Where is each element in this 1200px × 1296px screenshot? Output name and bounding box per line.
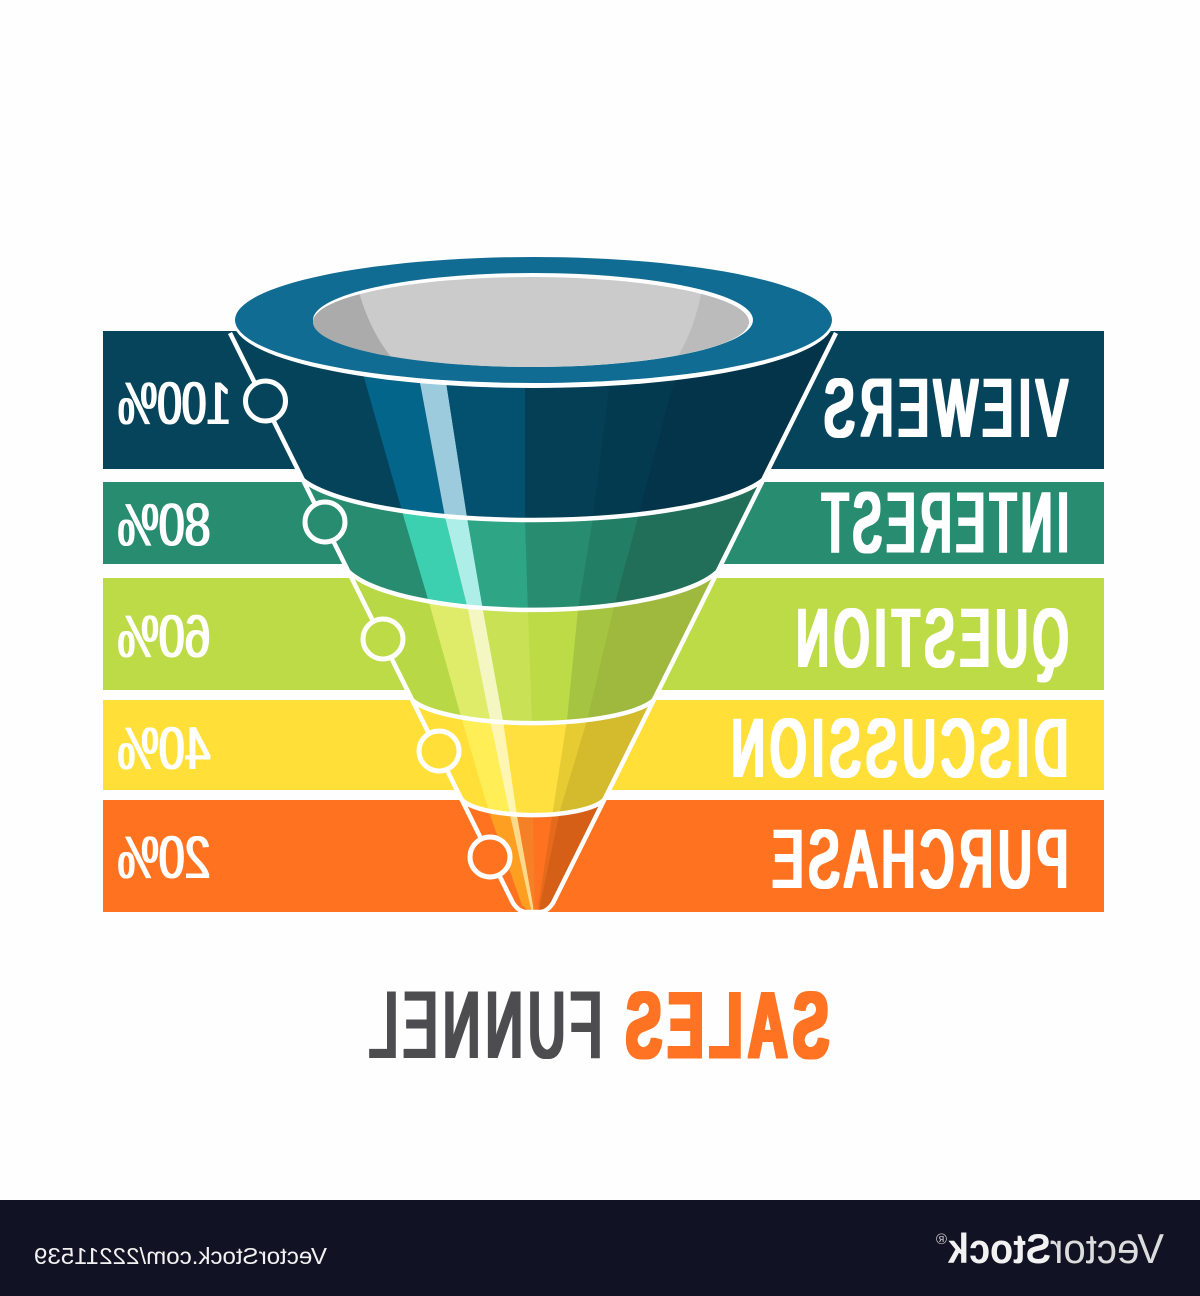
marker: 60% [363,619,403,659]
footer logo: Vector [1050,1225,1164,1272]
percent: 40%: 40% [118,715,210,782]
funnel opening [313,273,753,367]
percent: 80%: 80% [118,492,210,558]
footer logo: ® [936,1231,947,1248]
band: discussion [103,700,1104,790]
funnel section: discussion [418,706,648,813]
title: FUNNEL [364,972,602,1077]
funnel section: viewers [232,333,834,518]
funnel rim [234,256,834,388]
footer logo [936,1225,1164,1272]
percent: 20%: 20% [118,824,210,891]
percent: 60%: 60% [118,603,210,670]
band: interest [103,482,1104,564]
funnel section: interest [308,486,758,608]
marker: 20% [470,837,510,877]
funnel section: purchase [490,806,598,910]
label: purchase: PURCHASE [767,814,1068,905]
band: purchase [103,800,1104,912]
footer bar [0,1200,1200,1296]
label: discussion: DISCUSSION [726,703,1068,794]
percent: 100%: 100% [118,370,231,437]
funnel section: question [354,579,712,721]
footer logo: Stock [947,1225,1051,1272]
band: question [103,578,1104,690]
rim top [235,257,832,383]
label: viewers: VIEWERS [819,363,1067,454]
marker: 80% [305,502,345,542]
band: viewers [103,331,1104,469]
marker: 100% [246,381,286,421]
label: question: QUESTION [791,593,1068,684]
label: interest: INTEREST [817,476,1069,570]
funnel [228,257,838,912]
title: SALES [620,972,829,1078]
funnel outline [230,333,836,912]
marker: 40% [419,731,459,771]
footer url: VectorStock.com/22211539 [34,1243,327,1269]
